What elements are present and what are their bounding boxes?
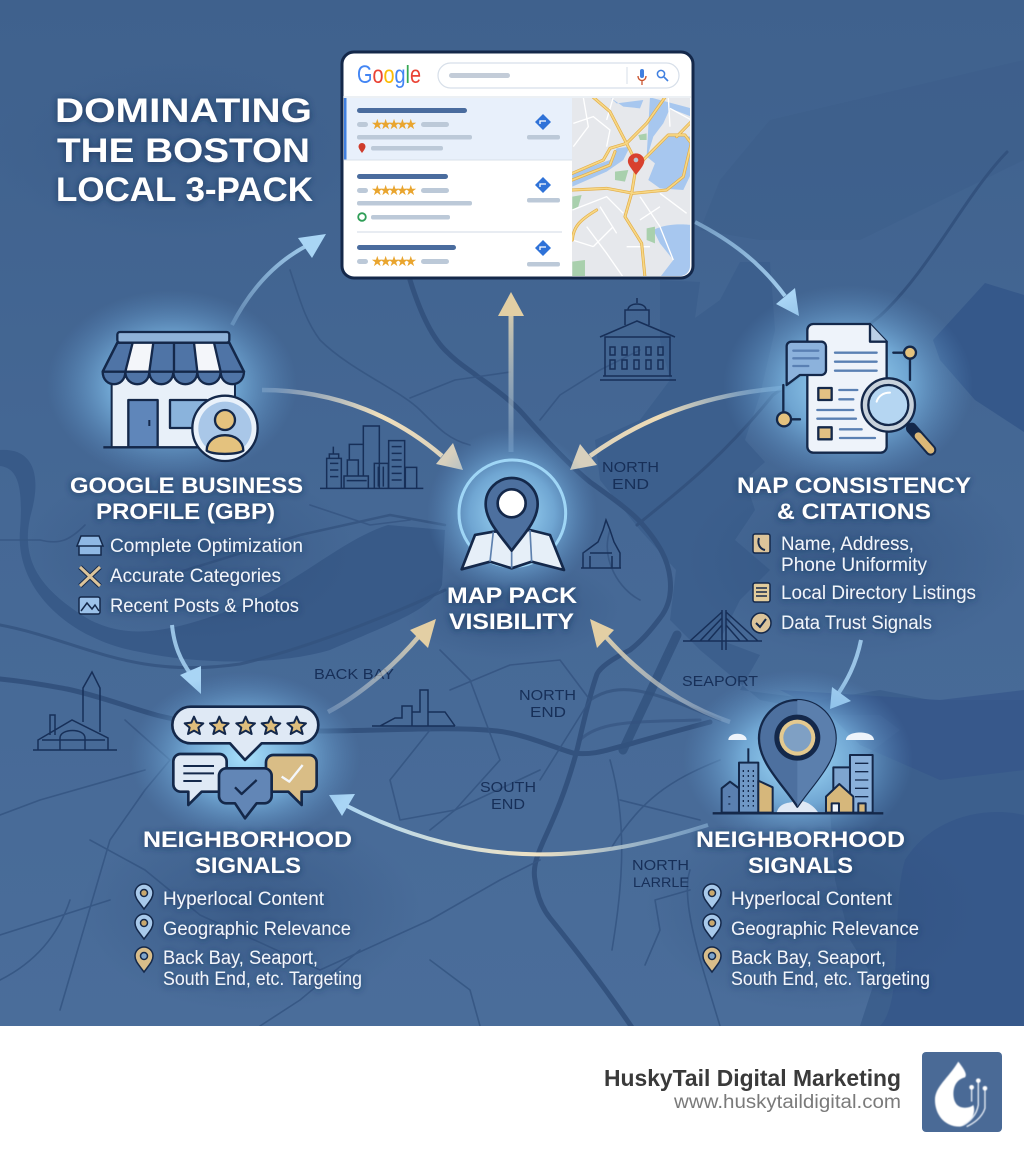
map neighbourhood labels: SOUTH [480, 779, 536, 796]
heading [70, 473, 303, 524]
heading [447, 583, 577, 634]
result 1 highlighted [344, 98, 572, 160]
landmark: Zakim bridge [683, 610, 762, 650]
landmark: Faneuil Hall [600, 298, 676, 380]
arrow: GBP to Google results [232, 234, 326, 325]
title: DOMINATING [55, 92, 312, 130]
minor streets [0, 270, 720, 1026]
arrow: GBP to Map Pack [262, 390, 463, 470]
arrow: Neighborhood to Reviews [329, 794, 708, 854]
panel: NAP consistency and citations [723, 285, 976, 634]
heading [696, 827, 905, 878]
panel: Google Business Profile [47, 290, 303, 617]
arrow: NAP to Neighborhood [830, 640, 861, 709]
arrow: Google results to NAP [695, 222, 799, 316]
list items: Phone Uniformity [781, 555, 927, 576]
result 3 [357, 240, 560, 269]
list items [781, 534, 976, 634]
list icons [751, 534, 771, 633]
icon: map pin on folded map [427, 428, 597, 598]
main roads [0, 152, 1007, 1029]
title: LOCAL 3-PACK [56, 171, 313, 209]
heading: NEIGHBORHOOD [696, 827, 905, 852]
list items: Hyperlocal Content [731, 889, 893, 910]
heading: GOOGLE BUSINESS [70, 473, 303, 498]
footer website: www.huskytaildigital.com [673, 1092, 901, 1113]
icon: location pin over city [683, 670, 913, 850]
arrow: GBP to Reviews [172, 625, 201, 694]
landmark: small skyline [372, 690, 455, 726]
list icons [77, 536, 103, 614]
footer band [0, 1026, 1024, 1154]
harbor water [595, 262, 1024, 1026]
arrow: Neighborhood to Map Pack [590, 619, 730, 722]
heading: PROFILE (GBP) [96, 499, 275, 524]
icon: review speech bubbles [130, 672, 360, 842]
panel: Google local results card [342, 52, 693, 278]
landmark: Old North Church [581, 520, 621, 568]
title [55, 92, 313, 209]
arrow: Reviews to Map Pack [328, 619, 436, 712]
list items: South End, etc. Targeting [163, 969, 362, 990]
list items: Back Bay, Seaport, [163, 948, 318, 969]
landmark: downtown skyline [320, 426, 423, 488]
heading: SIGNALS [195, 853, 301, 878]
list pin icons [135, 884, 153, 972]
landmark: Trinity Church [33, 672, 117, 750]
search bar [438, 63, 679, 88]
list items: Hyperlocal Content [163, 889, 325, 910]
heading: SIGNALS [748, 853, 853, 878]
panel: Map Pack Visibility centre [427, 428, 597, 634]
list items: Back Bay, Seaport, [731, 948, 886, 969]
title: THE BOSTON [57, 132, 310, 170]
list items: Complete Optimization [110, 536, 303, 557]
list items: Local Directory Listings [781, 583, 976, 604]
heading: MAP PACK [447, 583, 577, 608]
map neighbourhood labels [314, 459, 758, 890]
footer brand name: HuskyTail Digital Marketing [604, 1065, 901, 1091]
map neighbourhood labels: NORTH [602, 459, 659, 476]
map neighbourhood labels: END [612, 476, 649, 493]
map neighbourhood labels: BACK BAY [314, 666, 394, 683]
river and basin water [0, 450, 445, 662]
Google logo: Google [357, 61, 421, 89]
heading [143, 827, 352, 878]
list items [110, 536, 303, 617]
list items [163, 889, 362, 990]
arrow: Map Pack to Google results [498, 292, 524, 452]
heading [737, 473, 971, 524]
heading: & CITATIONS [777, 499, 931, 524]
panel: Neighborhood signals (reviews) [130, 672, 362, 990]
icon: storefront with profile badge [47, 290, 297, 480]
footer logo [922, 1052, 1002, 1132]
list items: Geographic Relevance [731, 919, 919, 940]
arrow: NAP to Map Pack [570, 388, 782, 470]
list items: Data Trust Signals [781, 613, 932, 634]
heading: NEIGHBORHOOD [143, 827, 352, 852]
result 3: ★★★★★ [371, 253, 417, 269]
map neighbourhood labels: NORTH [632, 857, 689, 874]
list items: Geographic Relevance [163, 919, 351, 940]
dark halos behind panels [20, 465, 360, 645]
heading: VISIBILITY [449, 609, 574, 634]
list items: Recent Posts & Photos [110, 596, 299, 617]
map neighbourhood labels: SEAPORT [682, 673, 758, 690]
heading: NAP CONSISTENCY [737, 473, 971, 498]
map neighbourhood labels: END [491, 796, 525, 813]
list items: South End, etc. Targeting [731, 969, 930, 990]
result 1 highlighted: ★★★★★ [371, 116, 417, 132]
icon: document with magnifier [723, 285, 973, 485]
list items: Accurate Categories [110, 566, 281, 587]
mini map with pin [572, 97, 692, 278]
map neighbourhood labels: NORTH [519, 687, 576, 704]
result 2: ★★★★★ [371, 182, 417, 198]
map neighbourhood labels: LARRLE [633, 874, 689, 890]
list items [731, 889, 930, 990]
panel: Neighborhood signals (location) [683, 670, 930, 990]
map neighbourhood labels: END [530, 704, 566, 721]
list pin icons [703, 884, 721, 972]
list items: Name, Address, [781, 534, 914, 555]
result 2 [357, 174, 562, 232]
